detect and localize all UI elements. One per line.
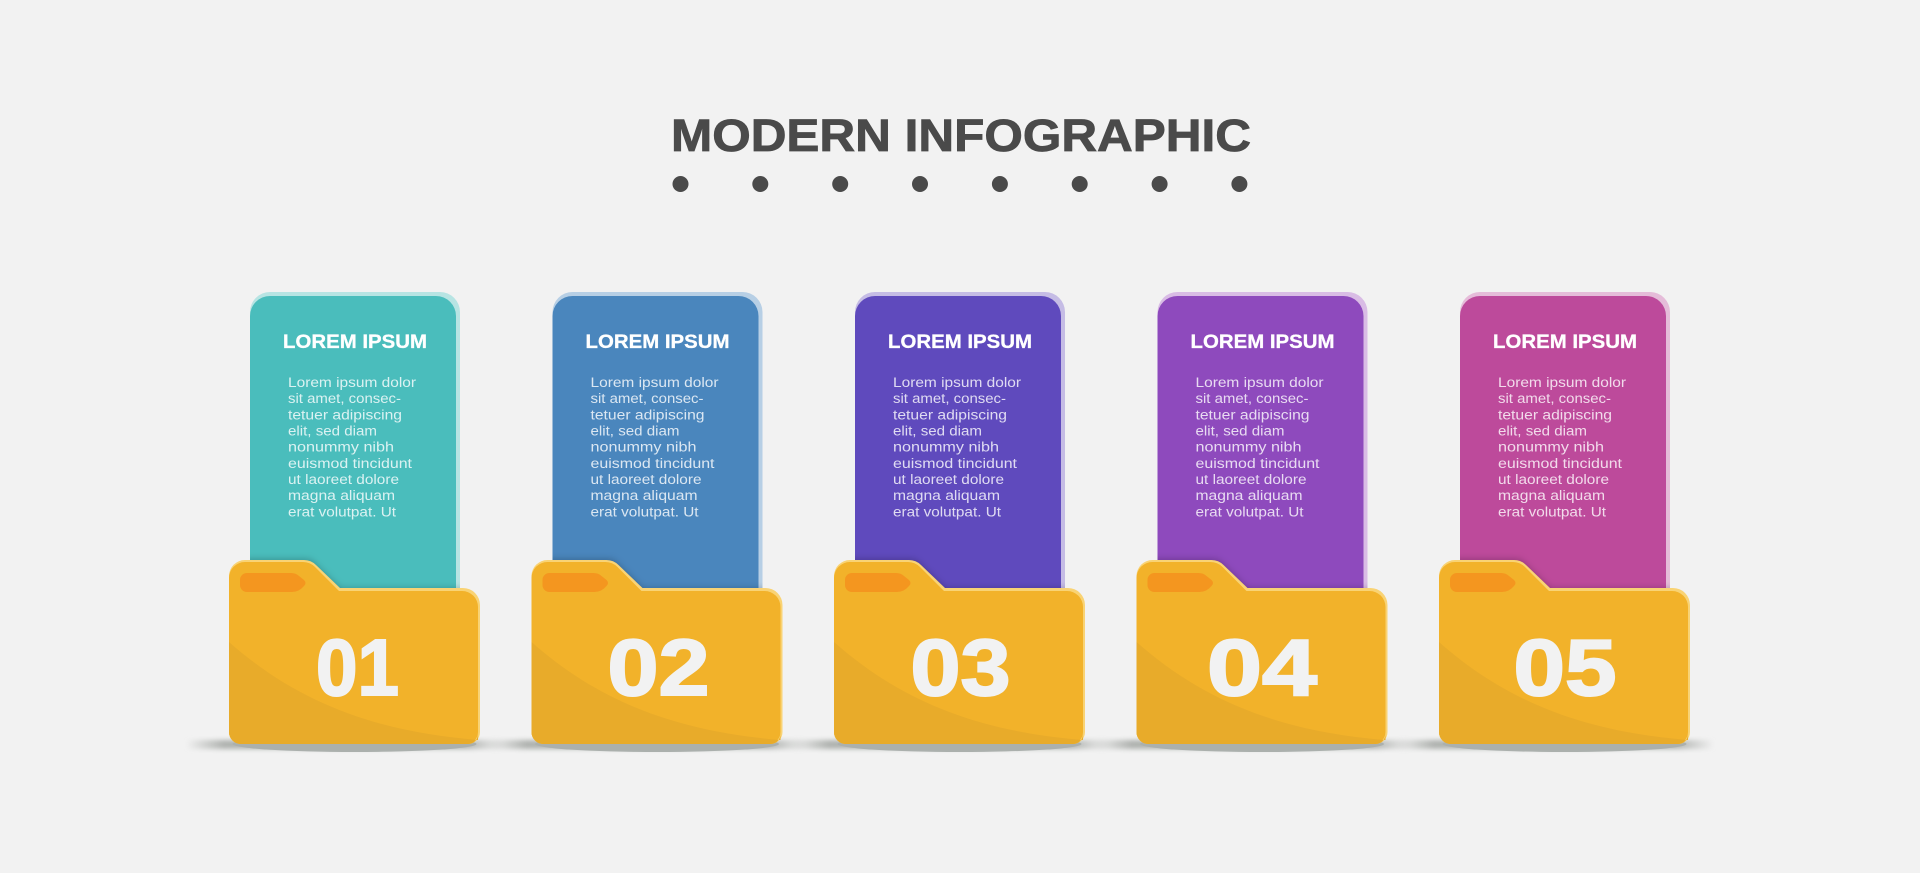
body text: nonummy nibh bbox=[893, 440, 999, 456]
folder ground shadow bbox=[791, 736, 1109, 752]
body text: sit amet, consec- bbox=[1498, 391, 1611, 407]
body text: tetuer adipiscing bbox=[590, 407, 704, 423]
body text: nonummy nibh bbox=[590, 440, 696, 456]
number: 03 bbox=[910, 623, 1010, 712]
body text: tetuer adipiscing bbox=[1196, 407, 1310, 423]
body text: tetuer adipiscing bbox=[288, 407, 402, 423]
body text: magna aliquam bbox=[288, 488, 395, 504]
card: indigo bbox=[855, 292, 1065, 588]
folder ground shadow bbox=[1094, 736, 1412, 752]
body text: sit amet, consec- bbox=[590, 391, 704, 407]
body text bbox=[1498, 375, 1626, 520]
heading: LOREM IPSUM bbox=[283, 331, 427, 353]
body text bbox=[1196, 375, 1324, 520]
body text: ut laoreet dolore bbox=[1196, 472, 1307, 488]
body text: euismod tincidunt bbox=[288, 456, 412, 472]
body text: elit, sed diam bbox=[1196, 424, 1284, 440]
body text: nonummy nibh bbox=[1498, 440, 1604, 456]
body text: ut laoreet dolore bbox=[288, 472, 399, 488]
number: 05 bbox=[1514, 623, 1616, 712]
body text: ut laoreet dolore bbox=[893, 472, 1004, 488]
body text: magna aliquam bbox=[1498, 488, 1605, 504]
body text: erat volutpat. Ut bbox=[1196, 504, 1304, 520]
panel: step 03 bbox=[791, 292, 1109, 752]
heading: LOREM IPSUM bbox=[888, 331, 1032, 353]
number: 04 bbox=[1207, 623, 1318, 712]
body text: sit amet, consec- bbox=[893, 391, 1006, 407]
heading: LOREM IPSUM bbox=[1493, 331, 1637, 353]
folder ground shadow bbox=[1396, 736, 1714, 752]
folder bbox=[1136, 560, 1388, 744]
heading: LOREM IPSUM bbox=[1190, 331, 1334, 353]
body text: magna aliquam bbox=[893, 488, 1000, 504]
body text: Lorem ipsum dolor bbox=[590, 375, 719, 391]
folder bbox=[1439, 560, 1690, 744]
folder bbox=[532, 560, 782, 744]
body text: elit, sed diam bbox=[288, 424, 377, 440]
card: blue bbox=[552, 292, 762, 588]
body text: ut laoreet dolore bbox=[1498, 472, 1609, 488]
panel: step 04 bbox=[1094, 292, 1412, 752]
body text: euismod tincidunt bbox=[590, 456, 715, 472]
body text: Lorem ipsum dolor bbox=[288, 375, 416, 391]
title: MODERN INFOGRAPHIC bbox=[671, 110, 1251, 161]
card: purple bbox=[1158, 292, 1368, 588]
panel: step 01 bbox=[186, 292, 504, 752]
card: teal bbox=[250, 292, 460, 588]
body text: Lorem ipsum dolor bbox=[1498, 375, 1626, 391]
body text: Lorem ipsum dolor bbox=[893, 375, 1021, 391]
body text: sit amet, consec- bbox=[288, 391, 401, 407]
dotted divider bbox=[672, 176, 1247, 192]
body text: elit, sed diam bbox=[590, 424, 680, 440]
body text: ut laoreet dolore bbox=[590, 472, 702, 488]
body text: euismod tincidunt bbox=[893, 456, 1017, 472]
folder bbox=[229, 560, 480, 744]
number: 02 bbox=[608, 623, 710, 712]
body text: elit, sed diam bbox=[893, 424, 982, 440]
body text: Lorem ipsum dolor bbox=[1196, 375, 1324, 391]
folder ground shadow bbox=[186, 736, 504, 752]
number: 01 bbox=[316, 623, 399, 712]
body text bbox=[893, 375, 1021, 520]
body text bbox=[590, 375, 719, 520]
body text: tetuer adipiscing bbox=[893, 407, 1007, 423]
body text: tetuer adipiscing bbox=[1498, 407, 1612, 423]
panel: step 02 bbox=[488, 292, 806, 752]
body text: erat volutpat. Ut bbox=[590, 504, 699, 520]
body text: magna aliquam bbox=[590, 488, 698, 504]
body text bbox=[288, 375, 416, 520]
card: magenta bbox=[1460, 292, 1670, 588]
folder bbox=[834, 560, 1085, 744]
body text: euismod tincidunt bbox=[1498, 456, 1622, 472]
panel: step 05 bbox=[1396, 292, 1714, 752]
body text: erat volutpat. Ut bbox=[1498, 504, 1606, 520]
body text: nonummy nibh bbox=[1196, 440, 1302, 456]
body text: elit, sed diam bbox=[1498, 424, 1587, 440]
body text: magna aliquam bbox=[1196, 488, 1302, 504]
heading: LOREM IPSUM bbox=[586, 331, 730, 353]
body text: euismod tincidunt bbox=[1196, 456, 1320, 472]
body text: nonummy nibh bbox=[288, 440, 394, 456]
body text: erat volutpat. Ut bbox=[893, 504, 1001, 520]
folder ground shadow bbox=[488, 736, 806, 752]
body text: sit amet, consec- bbox=[1196, 391, 1309, 407]
body text: erat volutpat. Ut bbox=[288, 504, 396, 520]
